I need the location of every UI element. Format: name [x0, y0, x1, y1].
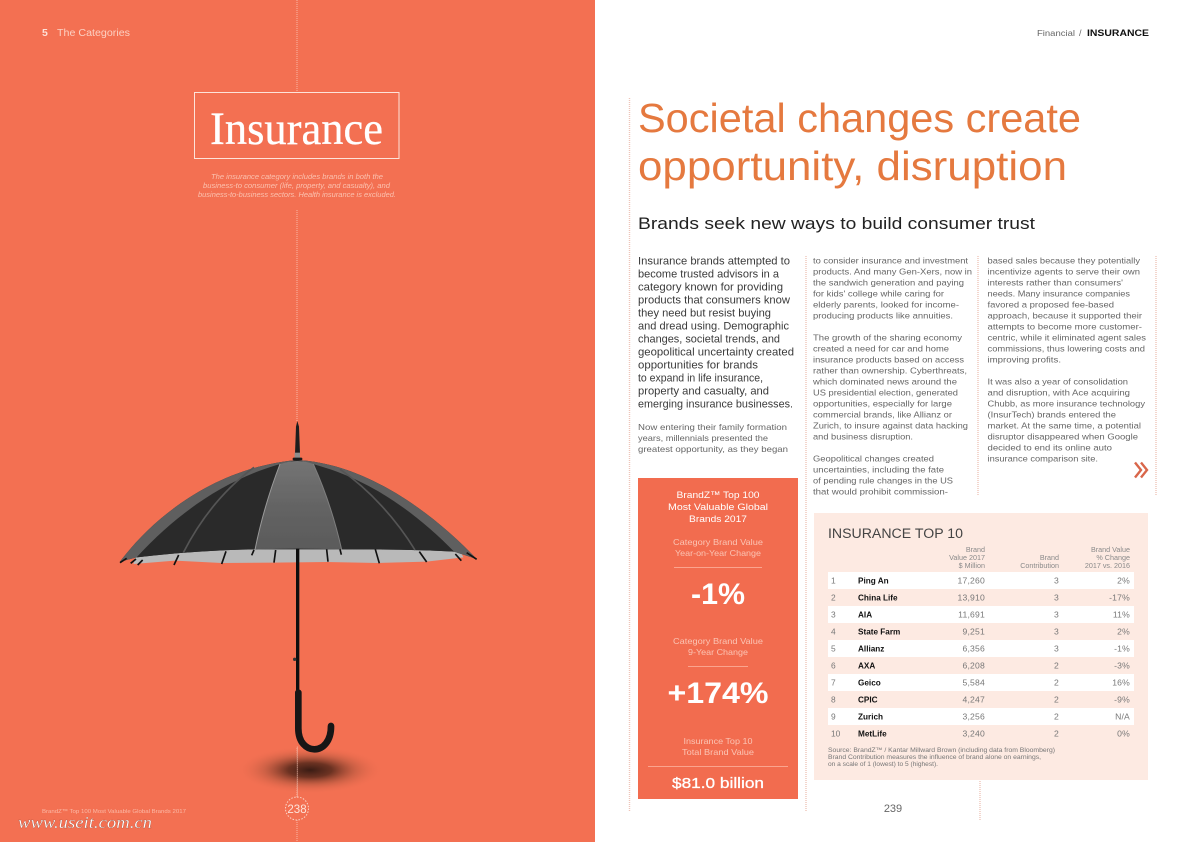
- row 9: N/A: [1115, 712, 1130, 722]
- article text: column 1: years, millennials presented the: [638, 433, 768, 443]
- table column headers: % Change: [1096, 553, 1130, 562]
- row 7: 7: [831, 678, 836, 688]
- stat: total brand value: Total Brand Value: [682, 747, 754, 757]
- table source note: on a scale of 1 (lowest) to 5 (highest).: [828, 761, 938, 768]
- table source note: [828, 747, 1055, 768]
- row 5: 3: [1054, 644, 1059, 654]
- article text: column 2: rather than ownership. Cyberthreats,: [813, 366, 967, 376]
- article lead paragraph: changes, societal trends, and: [638, 334, 780, 346]
- article lead paragraph: geopolitical uncertainty created: [638, 346, 794, 358]
- article text: column 3: attempts to become more customer-: [988, 322, 1142, 332]
- row 7: 5,584: [962, 678, 985, 688]
- table title: INSURANCE TOP 10: [828, 526, 963, 541]
- article lead paragraph: Insurance brands attempted to: [638, 256, 790, 268]
- article text: column 3: [988, 256, 1146, 464]
- article lead paragraph: products that consumers know: [638, 294, 790, 306]
- table source note: Brand Contribution measures the influence of brand alone on earnings,: [828, 754, 1041, 761]
- stat: total brand value: $81.0 billion: [672, 775, 764, 792]
- row 1: 1: [831, 576, 836, 586]
- article text: column 3: (InsurTech) brands entered the: [988, 410, 1116, 420]
- icon: continue chevrons: [1135, 462, 1147, 478]
- article text: column 3: disruptor disappeared when Google: [988, 432, 1138, 442]
- row 5: 6,356: [962, 644, 985, 654]
- stat: year-on-year change: -1%: [691, 578, 745, 611]
- page number 238: 238: [287, 804, 307, 816]
- row 2: China Life: [858, 594, 898, 602]
- article text: column 2: to consider insurance and investment: [813, 256, 969, 266]
- panel heading: [668, 490, 768, 525]
- category description: business-to-business sectors. Health insurance is excluded.: [198, 192, 396, 199]
- row 10: 0%: [1117, 728, 1130, 738]
- article text: column 3: decided to end its online auto: [988, 442, 1112, 452]
- grey right edge: [297, 460, 477, 559]
- grey left edge: [120, 460, 297, 562]
- row 1: 3: [1054, 576, 1059, 586]
- row 7: 16%: [1112, 678, 1130, 688]
- table source note: Source: BrandZ™ / Kantar Millward Brown (including data from Bloomberg): [828, 747, 1055, 754]
- article lead paragraph: category known for providing: [638, 282, 783, 294]
- page footer: source line: BrandZ™ Top 100 Most Valuable Global Brands 2017: [42, 809, 186, 815]
- row 2: 2: [831, 592, 836, 602]
- row 9: 9: [831, 712, 836, 722]
- headline: opportunity, disruption: [638, 143, 1067, 189]
- row 5: -1%: [1114, 644, 1130, 654]
- article text: column 1: Now entering their family formation: [638, 422, 787, 432]
- article text: column 2: insurance products based on access: [813, 354, 964, 364]
- article text: column 2: and business disruption.: [813, 432, 913, 442]
- row 1: 2%: [1117, 576, 1130, 586]
- centre panel: [255, 461, 342, 550]
- row 10: 10: [831, 728, 841, 738]
- article text: column 3: commissions, thus lowering costs and: [988, 344, 1145, 354]
- running header: INSURANCE: [1087, 28, 1149, 38]
- row 4: 9,251: [962, 626, 985, 636]
- stat: year-on-year change: Year-on-Year Change: [675, 548, 761, 558]
- row 7: Geico: [858, 678, 881, 688]
- row 4: 3: [1054, 626, 1059, 636]
- row 7: [831, 678, 1130, 688]
- row 9: 2: [1054, 712, 1059, 722]
- row 1: 17,260: [958, 576, 985, 586]
- article text: column 3: interests rather than consumers': [988, 278, 1123, 288]
- row 5: 5: [831, 644, 836, 654]
- table column headers: $ Million: [959, 561, 985, 570]
- article text: column 3: improving profits.: [988, 354, 1061, 364]
- row 6: [831, 660, 1130, 670]
- article text: column 2: The growth of the sharing economy: [813, 332, 963, 342]
- row 4: 2%: [1117, 626, 1130, 636]
- article text: column 2: created a need for car and home: [813, 344, 949, 354]
- article lead paragraph: property and casualty, and: [638, 386, 769, 398]
- table column headers: Contribution: [1020, 561, 1059, 570]
- article text: column 3: market. At the same time, a potential: [988, 420, 1141, 430]
- row 8: 4,247: [962, 694, 985, 704]
- article text: column 2: Geopolitical changes created: [813, 454, 934, 464]
- page number 239: 239: [884, 803, 902, 815]
- article text: column 1: greatest opportunity, as they began: [638, 444, 788, 454]
- row 8: 2: [1054, 694, 1059, 704]
- row 9: 3,256: [962, 712, 985, 722]
- row 5: [831, 644, 1130, 654]
- article text: column 2: uncertainties, including the fate: [813, 464, 944, 474]
- row 3: 11%: [1113, 610, 1130, 620]
- stat: total brand value: Insurance Top 10: [684, 736, 753, 746]
- article text: column 2: the sandwich generation and paying: [813, 278, 964, 288]
- shaft: [293, 549, 299, 694]
- article text: column 3: insurance comparison site.: [988, 454, 1098, 464]
- article text: column 2: products. And many Gen-Xers, now in: [813, 266, 972, 276]
- subheading: Brands seek new ways to build consumer trust: [638, 214, 1035, 233]
- article lead paragraph: and dread using. Demographic: [638, 320, 790, 332]
- category description: business-to consumer (life, property, and casualty), and: [203, 183, 391, 190]
- row 10: [831, 728, 1130, 738]
- row 2: 3: [1054, 592, 1059, 602]
- stat: 9-year change: 9-Year Change: [688, 647, 748, 657]
- panel: left page background: [0, 0, 595, 842]
- article lead paragraph: opportunities for brands: [638, 360, 758, 372]
- section marker: The Categories: 5: [42, 27, 48, 39]
- article text: column 3: centric, while it eliminated agent sales: [988, 332, 1146, 342]
- article text: column 2: of pending rule changes in the US: [813, 476, 953, 486]
- page number 238: [286, 797, 308, 820]
- article text: column 2: US presidential election, generated: [813, 388, 958, 398]
- row 3: 11,691: [958, 610, 985, 620]
- row 8: 8: [831, 694, 836, 704]
- panel heading: Brands 2017: [689, 514, 747, 525]
- row 5: Allianz: [858, 644, 884, 654]
- row 2: 13,910: [958, 592, 985, 602]
- row 1: [831, 576, 1130, 586]
- running header: [1037, 28, 1149, 38]
- row 10: MetLife: [858, 730, 887, 738]
- canopy underside: [133, 542, 463, 564]
- table column headers: 2017 vs. 2016: [1085, 561, 1130, 570]
- handle: [298, 693, 331, 749]
- row 8: CPIC: [858, 696, 878, 704]
- row 6: 6: [831, 660, 836, 670]
- row 2: -17%: [1109, 592, 1130, 602]
- article text: column 3: needs. Many insurance companies: [988, 288, 1130, 298]
- article text: column 1: [638, 422, 788, 454]
- article lead paragraph: to expand in life insurance,: [638, 372, 763, 384]
- article text: column 2: Zurich, to insure against data hacking: [813, 420, 968, 430]
- table column headers: Value 2017: [949, 553, 985, 562]
- category description: [198, 174, 396, 199]
- row 6: AXA: [858, 662, 875, 670]
- article text: column 3: approach, because it supported their: [988, 310, 1142, 320]
- running header: /: [1079, 28, 1082, 38]
- table column headers: Brand: [966, 545, 985, 554]
- article text: column 3: Chubb, as more insurance technology: [988, 398, 1146, 408]
- panel heading: Most Valuable Global: [668, 502, 768, 513]
- table column headers: Brand Value: [1091, 545, 1130, 554]
- running header: Financial: [1037, 28, 1075, 38]
- row 9: [831, 712, 1130, 722]
- row 2: [831, 592, 1130, 602]
- row 6: 2: [1054, 660, 1059, 670]
- stat: total brand value: [648, 736, 788, 792]
- headline: Societal changes create: [638, 95, 1081, 141]
- row 1: Ping An: [858, 576, 889, 586]
- section marker: The Categories: The Categories: [57, 28, 130, 39]
- stat: 9-year change: Category Brand Value: [673, 636, 763, 646]
- row 3: 3: [831, 610, 836, 620]
- row 8: [831, 694, 1130, 704]
- row 6: -3%: [1114, 660, 1130, 670]
- article text: column 3: It was also a year of consolidation: [988, 376, 1128, 386]
- panel: Insurance Top 10 table: [814, 513, 1148, 780]
- panel heading: BrandZ™ Top 100: [676, 490, 760, 501]
- row 3: [831, 610, 1130, 620]
- table column headers: Brand: [1040, 553, 1059, 562]
- article text: column 2: elderly parents, looked for income-: [813, 300, 959, 310]
- article lead paragraph: become trusted advisors in a: [638, 268, 779, 280]
- article text: column 3: based sales because they potentially: [988, 256, 1141, 266]
- stat: 9-year change: +174%: [668, 677, 768, 710]
- row 8: -9%: [1114, 694, 1130, 704]
- article lead paragraph: [638, 256, 794, 410]
- article text: column 2: opportunities, especially for large: [813, 398, 952, 408]
- article text: column 2: producing products like annuities.: [813, 310, 953, 320]
- row 10: 2: [1054, 728, 1059, 738]
- stat: year-on-year change: Category Brand Value: [673, 537, 763, 547]
- row 3: 3: [1054, 610, 1059, 620]
- panel: right page background: [595, 0, 1191, 842]
- umbrella illustration: [120, 421, 477, 798]
- article text: column 3: incentivize agents to serve their own: [988, 266, 1140, 276]
- row 9: Zurich: [858, 712, 883, 722]
- title box: Insurance: Insurance: [210, 103, 383, 155]
- article text: column 3: favored a proposed fee-based: [988, 300, 1114, 310]
- row 7: 2: [1054, 678, 1059, 688]
- table column headers: [949, 545, 1130, 570]
- category description: The insurance category includes brands in both the: [211, 174, 383, 181]
- row 10: 3,240: [962, 728, 985, 738]
- ferrule: [293, 421, 302, 460]
- row 4: State Farm: [858, 628, 900, 636]
- article text: column 2: that would prohibit commission-: [813, 486, 948, 496]
- row 4: [831, 626, 1130, 636]
- article lead paragraph: emerging insurance businesses.: [638, 398, 793, 410]
- canopy ribs: [120, 549, 477, 565]
- row 3: AIA: [858, 610, 872, 620]
- panel: BrandZ key figures: [638, 478, 798, 799]
- stat: 9-year change: [668, 636, 768, 710]
- ground shadow: [237, 746, 383, 794]
- stat: year-on-year change: [673, 537, 763, 611]
- row 6: 6,208: [962, 660, 985, 670]
- article text: column 2: commercial brands, like Allianz or: [813, 410, 952, 420]
- article text: column 2: which dominated news around the: [812, 376, 957, 386]
- canopy: [120, 460, 477, 562]
- headline: [638, 95, 1081, 189]
- article text: column 2: for kids' college while caring for: [813, 288, 944, 298]
- row 4: 4: [831, 626, 836, 636]
- article text: column 3: and disruption, with Ace acquiring: [988, 388, 1130, 398]
- article lead paragraph: they need but resist buying: [638, 308, 771, 320]
- article text: column 2: [812, 256, 972, 496]
- watermark: www.useit.com.cn: [18, 813, 152, 832]
